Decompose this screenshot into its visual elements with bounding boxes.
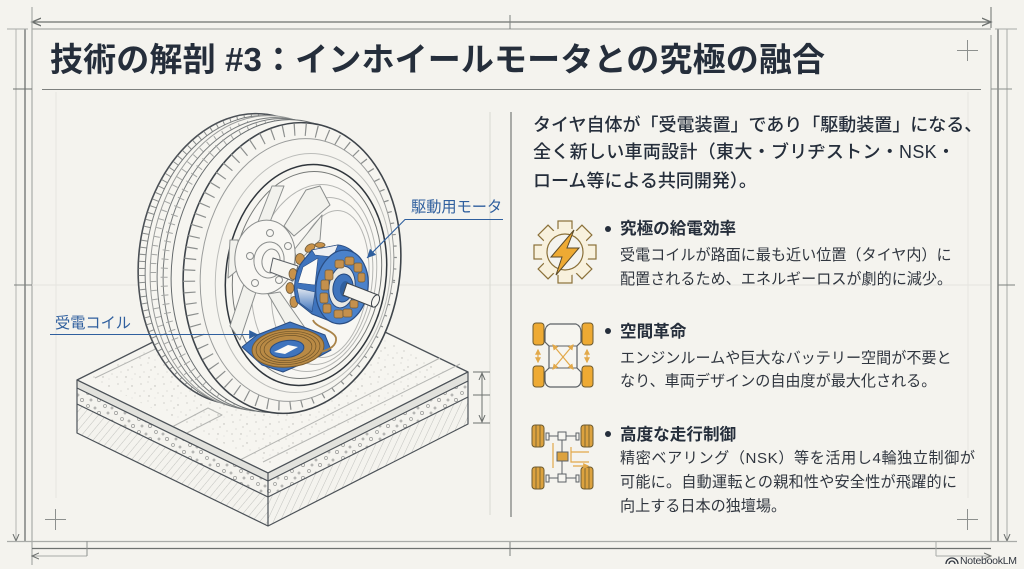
road outlines: [77, 372, 468, 526]
receiver coil: [242, 320, 336, 372]
bullet: space revolution: なり、車両デザインの自由度が最大化される。: [620, 372, 936, 390]
bullet: advanced driving control: 向上する日本の独壇場。: [620, 498, 786, 515]
rotor hub: [331, 273, 355, 303]
stator body: [295, 245, 367, 323]
icon: four-wheel independent control: [532, 425, 593, 489]
bullet: feeding efficiency: [605, 219, 952, 288]
intro text: ローム等による共同開発）。: [533, 171, 757, 191]
rear coils: [286, 242, 325, 308]
icon: car chassis space: [533, 323, 593, 387]
front coils: [320, 257, 365, 318]
intro text: タイヤ自体が「受電装置」であり「駆動装置」になる、: [533, 114, 982, 135]
bullet: space revolution: 空間革命: [620, 322, 687, 341]
icon: gear with lightning bolt: [534, 221, 596, 283]
front shaft: [343, 283, 378, 307]
dimension marker: [473, 372, 490, 423]
bullet: feeding efficiency: 配置されるため、エネルギーロスが劇的に減少。: [620, 271, 952, 288]
in-wheel motor: [270, 242, 381, 327]
label: drive motor: [367, 199, 503, 258]
tire sidewall: [165, 108, 419, 428]
road right section: [268, 372, 468, 526]
intro text: 全く新しい車両設計（東大・ブリヂストン・NSK・: [533, 141, 955, 162]
road block illustration: [77, 280, 468, 526]
bullet: advanced driving control: 精密ベアリング（NSK）等を活用し4輪独立制御が: [620, 449, 975, 467]
bullet: advanced driving control: 可能に。自動運転との親和性や安全性が飛躍的に: [620, 474, 957, 491]
rear shaft: [270, 258, 298, 281]
hub disk: [230, 216, 300, 298]
NotebookLM watermark: NotebookLM: [960, 555, 1017, 567]
bullet: advanced driving control: [605, 424, 975, 515]
bullet: feeding efficiency: 受電コイルが路面に最も近い位置（タイヤ内）に: [620, 247, 952, 264]
bullet: space revolution: [605, 322, 952, 390]
rim lip: [211, 154, 401, 396]
bullet: space revolution: エンジンルームや巨大なバッテリー空間が不要と: [620, 350, 952, 367]
title: 技術の解剖 #3：インホイールモータとの究極の融合: [50, 41, 825, 78]
bullet: advanced driving control: 高度な走行制御: [620, 424, 736, 444]
bullet: feeding efficiency: 究極の給電効率: [620, 219, 736, 238]
spokes: [228, 186, 330, 342]
label: drive motor: 駆動用モータ: [411, 199, 502, 216]
wheel with tire: [120, 99, 419, 428]
intro text: [533, 114, 982, 191]
label: receiver coil: 受電コイル: [55, 315, 131, 332]
rim barrel: [240, 176, 388, 380]
road left section: [77, 380, 268, 526]
stator face: [311, 247, 373, 327]
tire back layers: [120, 99, 407, 427]
road top surface: [77, 280, 468, 473]
